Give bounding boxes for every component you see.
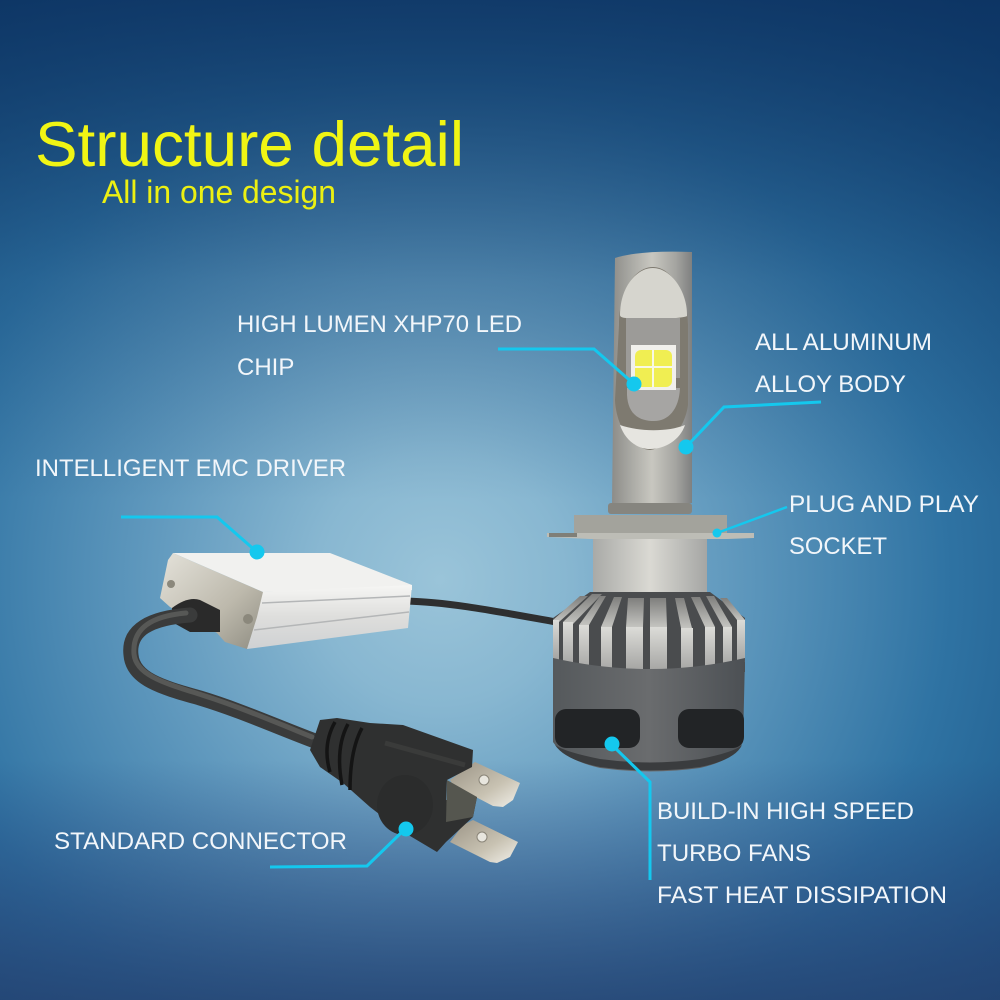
- heat sink dark core: [553, 592, 745, 672]
- callout: EMC driver: [35, 455, 346, 560]
- callout: turbo fans: TURBO FANS: [657, 840, 811, 867]
- left fan window: [555, 709, 640, 748]
- connector bottom pin: [450, 820, 518, 863]
- callout: socket: SOCKET: [789, 533, 887, 560]
- bulb plate: [547, 533, 754, 539]
- callout: aluminum body: ALLOY BODY: [755, 371, 906, 398]
- callout: standard connector: STANDARD CONNECTOR: [54, 828, 347, 855]
- driver end face: [160, 553, 263, 649]
- bulb collar: [608, 503, 692, 514]
- connector body: [310, 718, 477, 852]
- LED chip: [631, 345, 676, 390]
- driver top face: [173, 553, 412, 592]
- callout: turbo fans: BUILD-IN HIGH SPEED: [657, 798, 914, 825]
- connector cable: [131, 613, 315, 741]
- driver strain relief: [172, 599, 220, 632]
- driver cable to bulb: [405, 601, 556, 622]
- callout: turbo fans: [604, 736, 947, 909]
- fins: [553, 594, 745, 674]
- connector top pin: [450, 762, 520, 807]
- driver side face: [247, 585, 412, 649]
- callout: LED chip: CHIP: [237, 354, 294, 381]
- callout: socket: [712, 491, 979, 560]
- chip window: [615, 267, 688, 450]
- upper lens: [620, 268, 687, 318]
- bulb flange: [574, 515, 727, 533]
- heat sink: [553, 592, 745, 772]
- callout: LED chip: [237, 311, 642, 392]
- callout: turbo fans: FAST HEAT DISSIPATION: [657, 882, 947, 909]
- EMC driver box: [160, 553, 412, 649]
- bulb tube: [612, 252, 692, 503]
- callout: aluminum body: [678, 329, 932, 454]
- title: Structure detail: [35, 110, 464, 180]
- chip mount: [626, 318, 680, 378]
- callout: LED chip: HIGH LUMEN XHP70 LED: [237, 311, 522, 338]
- callout: standard connector: [54, 822, 414, 867]
- lower reflector: [620, 425, 685, 449]
- LED bulb: [547, 252, 754, 593]
- H4 connector: [310, 718, 520, 863]
- bulb neck: [593, 539, 707, 593]
- callout: EMC driver: INTELLIGENT EMC DRIVER: [35, 455, 346, 482]
- driver screws: [167, 580, 175, 588]
- subtitle: All in one design: [102, 174, 336, 210]
- callout: aluminum body: ALL ALUMINUM: [755, 329, 932, 356]
- right fan window: [678, 709, 744, 748]
- callout: socket: PLUG AND PLAY: [789, 491, 979, 518]
- fan housing: [553, 658, 745, 772]
- housing lower lip: [555, 745, 742, 770]
